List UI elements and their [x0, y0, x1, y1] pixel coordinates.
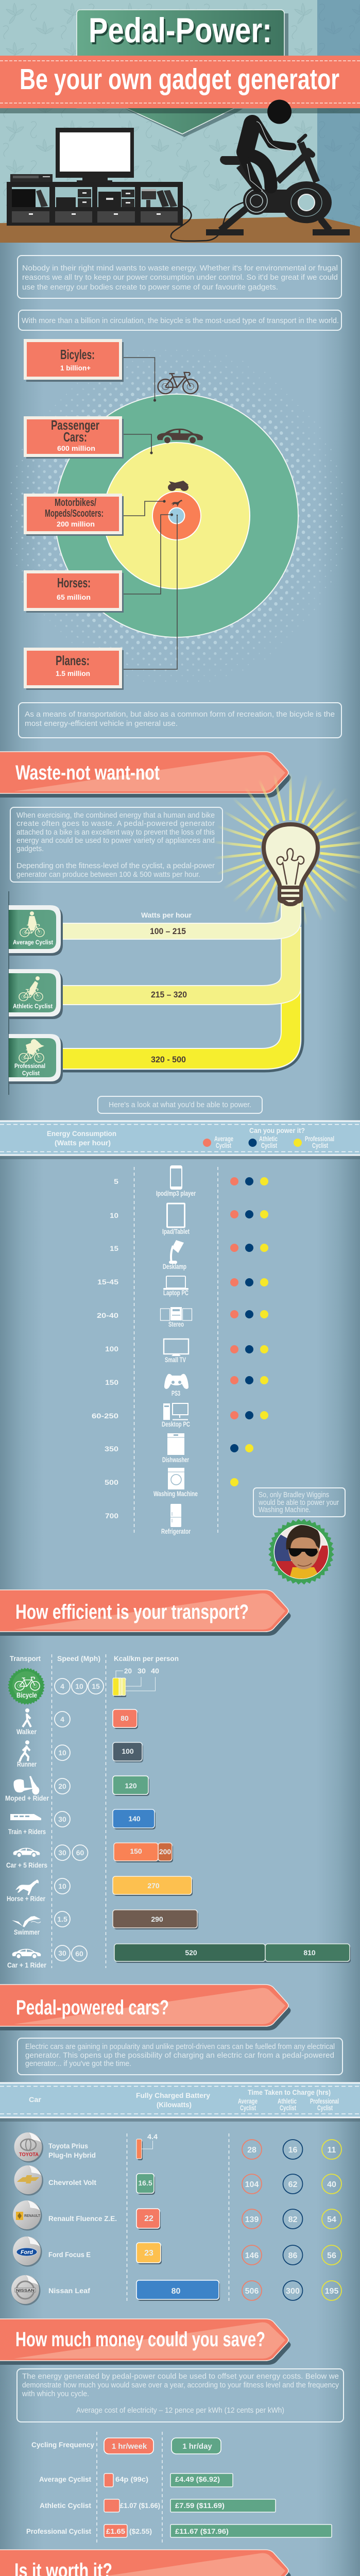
electric cars text box [18, 2038, 342, 2075]
row: washing machine: 500 [105, 1478, 118, 1486]
label: horses: 65 million [57, 593, 91, 601]
electric cars text box: Electric cars are gaining in popularity and unlike petrol-driven cars can be fuelled from any electrical [25, 2042, 335, 2051]
row: toyota: 28 [247, 2146, 256, 2155]
ring: bicycles [55, 394, 298, 637]
row: runner: Runner [17, 1760, 37, 1768]
electric cars text box: generator... if you've got the time. [25, 2059, 131, 2068]
row: bicycle: 10 [75, 1682, 83, 1690]
pipe: average [62, 899, 301, 939]
column header: time: Average [238, 2097, 258, 2105]
row: ford: 86 [288, 2251, 298, 2260]
row: stereo: Stereo [168, 1320, 184, 1328]
icon: horse [171, 500, 182, 506]
row: car + 1 [7, 1944, 351, 1969]
column header: car: Car [29, 2095, 42, 2104]
callout: bradley wiggins: would be able to power your [258, 1498, 339, 1507]
row: ipod: 5 [114, 1177, 118, 1185]
row: bicycle: 20 [124, 1667, 132, 1675]
row: laptop: 15-45 [97, 1278, 118, 1286]
tag: athletic cyclist: Athletic Cyclist [13, 1003, 53, 1010]
waste text box [10, 807, 222, 882]
row: athletic [40, 2499, 276, 2512]
row: nissan: NISSAN [16, 2289, 35, 2293]
intro text box: use the energy our bodies create to power some of our favourite gadgets. [22, 283, 278, 292]
bicycle fact box: With more than a billion in circulation, the bicycle is the most-used type of transport in the world. [22, 316, 339, 325]
row: horse: 10 [58, 1882, 66, 1890]
row: ps3: PS3 [172, 1389, 180, 1397]
bicycle fact box [19, 310, 341, 330]
frequency header: 1 hr/day [182, 2442, 212, 2451]
row: chevrolet: 62 [288, 2180, 298, 2189]
energy table [92, 1166, 268, 1535]
row: toyota: Toyota Prius [48, 2142, 88, 2150]
column header: energy consumption: (Watts per hour) [55, 1139, 111, 1147]
column header: energy consumption: Energy Consumption [47, 1129, 116, 1138]
tag: professional cyclist: Professional [14, 1062, 45, 1070]
transport efficiency chart [5, 1654, 351, 1969]
label: planes [25, 649, 124, 690]
row: bicycle: Bicycle [16, 1691, 37, 1699]
row: train: 140 [128, 1815, 141, 1823]
heading banner: waste-not [0, 752, 290, 798]
heading banner: money: How much money could you save? [15, 2328, 265, 2351]
row: nissan: 80 [172, 2287, 180, 2296]
intro to power table: Here's a look at what you'd be able to power. [109, 1100, 251, 1109]
row: ipad [110, 1204, 268, 1235]
label: bicycles [25, 341, 124, 382]
intro to power table [98, 1096, 262, 1113]
legend: Cyclist [312, 1141, 328, 1149]
row: car + 5: 150 [130, 1847, 142, 1855]
column header: battery [136, 2091, 210, 2109]
heading banner: pedal-powered cars [0, 1985, 290, 2030]
row: average: £4.49 ($6.92) [175, 2475, 220, 2483]
row: bicycle: 4 [60, 1682, 64, 1690]
row: car + 1: Car + 1 Rider [7, 1961, 46, 1969]
row: chevrolet: 104 [245, 2180, 259, 2189]
label: motorbikes: Mopeds/Scooters: [45, 508, 104, 519]
row: athletic: £7.59 ($11.69) [175, 2501, 225, 2510]
header scene [0, 0, 360, 243]
value: professional: 320 - 500 [151, 1055, 186, 1064]
legend: Cyclist [216, 1141, 231, 1149]
row: car + 1: 60 [75, 1950, 83, 1958]
electric cars text box: generator. This opens up the possibility of charging an electric car from a pedal-powered [25, 2051, 334, 2060]
main title: Pedal-Power: [90, 13, 273, 52]
waste text box: generator can produce between 100 & 500 watts per hour. [16, 870, 200, 879]
row: desktop pc: Desktop PC [162, 1420, 190, 1428]
heading banner: pedal-powered cars: Pedal-powered cars? [16, 1996, 169, 2019]
callout: bradley wiggins: Washing Machine. [259, 1505, 311, 1514]
efficiency text box: As a means of transportation, but also as a common form of recreation, the bicycle is the [25, 710, 335, 719]
row: train [8, 1809, 156, 1836]
wooden floor [0, 216, 360, 243]
row: ford: 23 [144, 2249, 153, 2258]
heading banner: worth it [0, 2550, 290, 2576]
halftone dots [13, 352, 340, 679]
row: chevrolet: 40 [327, 2180, 336, 2189]
row: ipad: 10 [110, 1211, 118, 1219]
watts per hour label: Watts per hour [141, 911, 192, 919]
row: washing machine: Washing Machine [153, 1489, 198, 1498]
row: nissan [11, 2275, 341, 2305]
row: chevrolet: Chevrolet Volt [48, 2178, 96, 2187]
row: moped [5, 1776, 149, 1802]
column header: time: Cyclist [240, 2104, 256, 2112]
label: bicycles: Bicyles: [60, 347, 95, 362]
column header: time: Time Taken to Charge (hrs) [248, 2088, 331, 2096]
waste text box: energy and could be used to power variety of appliances and [16, 836, 215, 845]
row: bicycle: 30 [138, 1667, 146, 1675]
cyclist tags [9, 891, 63, 1095]
legend: Average [214, 1134, 233, 1143]
label: planes: Planes: [56, 653, 90, 668]
row: laptop: Laptop PC [163, 1289, 188, 1297]
row: horse: 270 [147, 1882, 160, 1890]
heading banner: how efficient: How efficient is your transport? [15, 1601, 249, 1623]
icon: light bulb [264, 824, 318, 906]
frequency header: 1 hr/week [112, 2442, 147, 2451]
frequency header: Cycling Frequency [31, 2441, 94, 2449]
value: average: 100 – 215 [150, 926, 186, 936]
label: motorbikes: Motorbikes/ [55, 497, 96, 509]
tag: average cyclist: Average Cyclist [13, 939, 53, 946]
waste text box: create often goes to waste. A pedal-powered generator [16, 819, 215, 828]
tag: professional cyclist: Cyclist [22, 1070, 40, 1077]
TV [56, 128, 134, 183]
row: toyota: TOYOTA [19, 2152, 39, 2158]
column header: time: Professional [310, 2097, 339, 2105]
row: train: Train + Riders [8, 1827, 46, 1836]
power cable [171, 202, 244, 241]
column header: battery: Fully Charged Battery [136, 2091, 210, 2099]
efficiency text box: most energy-efficient vehicle in general use. [25, 719, 178, 728]
row: ps3: 150 [105, 1378, 118, 1386]
row: stereo [97, 1307, 268, 1328]
value: athletic: 215 – 320 [151, 990, 187, 999]
row: professional: ($2.55) [129, 2527, 152, 2535]
row: average: 64p (99c) [115, 2475, 148, 2483]
row: nissan: 300 [286, 2287, 300, 2296]
callout: bradley wiggins: So, only Bradley Wiggins [259, 1490, 329, 1499]
intro text box: Nobody in their right mind wants to waste energy. Whether it's for environmental or frugal [22, 264, 338, 273]
ribbon [0, 56, 360, 113]
row: ford: Ford [21, 2249, 33, 2256]
row: bicycle [8, 1667, 159, 1705]
row: moped: 120 [125, 1782, 137, 1790]
row: dishwasher: Dishwasher [162, 1455, 189, 1464]
row: average [39, 2473, 233, 2487]
row: ps3 [105, 1374, 268, 1397]
column header: time: Athletic [278, 2097, 297, 2105]
row: walker: 4 [60, 1715, 64, 1723]
transport numbers concentric chart [13, 341, 340, 690]
row: washing machine [105, 1468, 238, 1498]
row: renault [13, 2200, 341, 2231]
row: car + 1: 520 [185, 1948, 197, 1957]
wattage pipes [62, 899, 303, 1071]
row: small tv: Small TV [165, 1355, 186, 1364]
callout: bradley wiggins [253, 1488, 345, 1517]
column headers: Kcal/km per person [114, 1654, 179, 1663]
row: car + 5 [6, 1843, 173, 1869]
green title badge [77, 10, 288, 137]
row: refrigerator: Refrigerator [161, 1527, 191, 1535]
icon: light bulb rays [209, 768, 360, 931]
row: professional: £1.65 [106, 2527, 125, 2535]
legend: Professional [305, 1134, 334, 1143]
label: planes: 1.5 million [56, 669, 90, 677]
row: moped: Moped + Rider [5, 1794, 49, 1802]
row: renault: Renault Fluence Z.E. [48, 2214, 117, 2223]
row: dishwasher: 350 [105, 1445, 118, 1453]
column headers: Speed (Mph) [57, 1654, 100, 1663]
connector lines [121, 358, 177, 669]
money text box: The energy generated by pedal-power could be used to offset your energy costs. Below we [22, 2372, 339, 2381]
column headers [10, 1654, 179, 1663]
label: motorbikes: 200 million [57, 520, 95, 528]
row: average: Average Cyclist [39, 2475, 91, 2483]
tag: professional cyclist [9, 1034, 63, 1084]
row: horse: Horse + Rider [7, 1894, 45, 1903]
row: car + 5: 60 [76, 1849, 84, 1857]
row: walker [16, 1708, 138, 1736]
row: nissan: Nissan Leaf [48, 2286, 90, 2295]
main title: Pedal-Power: [89, 11, 272, 50]
column header: time [238, 2088, 339, 2112]
row: runner: 10 [58, 1749, 66, 1757]
row: renault: 139 [245, 2215, 259, 2224]
row: swimmer: Swimmer [14, 1928, 40, 1936]
row: athletic: £1.07 ($1.66) [120, 2501, 160, 2510]
savings chart [26, 2432, 332, 2544]
row: walker: Walker [16, 1727, 37, 1736]
row: refrigerator: 700 [105, 1512, 118, 1520]
label: passenger cars: Cars: [63, 429, 87, 445]
row: athletic: Athletic Cyclist [40, 2501, 91, 2510]
cabinet [7, 182, 183, 226]
row: small tv [105, 1339, 268, 1364]
money text box [17, 2369, 344, 2422]
icon: motorbike [168, 481, 188, 491]
row: toyota: 16 [288, 2146, 298, 2155]
row: nissan: 195 [325, 2287, 338, 2296]
exercise bike and rider [206, 100, 350, 235]
waste text box: When exercising, the combined energy that a human and bike [16, 811, 215, 820]
heading banner: waste-not: Waste-not want-not [15, 761, 160, 784]
row: swimmer [12, 1910, 198, 1936]
row: car + 5: 30 [58, 1849, 66, 1857]
row: chevrolet [14, 2165, 341, 2196]
row: renault: 54 [327, 2215, 336, 2224]
row: ipad: Ipad/Tablet [162, 1227, 190, 1235]
row: runner: 100 [122, 1747, 134, 1755]
waste text box: gadgets. [16, 844, 44, 853]
row: car + 1: 30 [58, 1949, 66, 1957]
label: horses [25, 572, 124, 613]
row: desk lamp: Desklamp [163, 1262, 186, 1270]
intro text box: reasons we all try to keep our power consumption under control. So it'd be great if we could [22, 273, 338, 282]
row: moped: 20 [58, 1782, 66, 1790]
row: train: 30 [58, 1815, 66, 1823]
pipe shadow [62, 907, 303, 1071]
tag: athletic cyclist [9, 969, 63, 1019]
frequency header [31, 2438, 221, 2454]
row: desk lamp: 15 [110, 1244, 118, 1252]
icon: bicycle [158, 372, 198, 394]
legend [203, 1134, 334, 1149]
label: passenger cars: Passenger [51, 417, 99, 433]
tag: average cyclist [9, 905, 63, 956]
legend: Cyclist [261, 1141, 277, 1149]
band: energy table header [0, 1121, 360, 1159]
label: bicycles: 1 billion+ [60, 364, 91, 372]
row: horse [7, 1876, 193, 1903]
electric cars table [11, 2132, 341, 2305]
row: desk lamp [110, 1240, 268, 1270]
DVD player [10, 174, 53, 182]
row: walker: 80 [121, 1714, 129, 1722]
row: toyota: 11 [328, 2146, 336, 2155]
row: renault: 22 [144, 2214, 153, 2223]
column header: time: Cyclist [317, 2104, 333, 2112]
row: swimmer: 290 [151, 1915, 163, 1923]
label: horses: Horses: [57, 575, 91, 590]
column header: energy consumption [47, 1129, 116, 1147]
row: bicycle: 15 [92, 1682, 100, 1690]
row: chevrolet: 16.5 [138, 2179, 152, 2187]
row: nissan: 506 [245, 2287, 259, 2296]
icon: car [157, 429, 203, 443]
row: professional [26, 2524, 332, 2537]
row: renault: RENAULT [24, 2214, 41, 2218]
row: ford: Ford Focus E [48, 2250, 91, 2259]
efficiency text box [19, 703, 341, 738]
tag spine [8, 891, 9, 1095]
row: dishwasher [105, 1433, 253, 1464]
row: car + 1: 810 [303, 1948, 316, 1957]
waste text box: attached to a bike is an excellent way to prevent the loss of this [16, 828, 215, 837]
ring: motorbikes [152, 492, 201, 540]
wallpapered wall [0, 0, 360, 227]
heading banner: money [0, 2319, 290, 2365]
row: toyota: 4.4 [147, 2132, 158, 2141]
column header: battery: (Kilowatts) [157, 2100, 192, 2109]
money text box: Average cost of electricity – 12 pence per kWh (12 cents per kWh) [76, 2406, 284, 2415]
column header: can you power it: Can you power it? [249, 1126, 305, 1134]
row: ipod: Ipod/mp3 player [156, 1189, 196, 1197]
legend: Athletic [259, 1134, 278, 1143]
ring: cars [104, 443, 250, 589]
waste text box: Depending on the fitness-level of the cyclist, a pedal-power [16, 861, 215, 870]
row: ipod [114, 1166, 268, 1197]
row: desktop pc [92, 1403, 268, 1428]
portrait: bradley wiggins [268, 1519, 334, 1585]
row: swimmer: 1.5 [57, 1915, 67, 1923]
label: motorbikes [25, 495, 124, 536]
row: laptop [97, 1276, 268, 1297]
row: ford: 146 [245, 2251, 259, 2260]
row: toyota [14, 2132, 341, 2163]
label: passenger cars [25, 417, 124, 459]
row: stereo: 20-40 [97, 1311, 118, 1319]
row: renault: 82 [288, 2215, 298, 2224]
row: car + 5: Car + 5 Riders [6, 1861, 47, 1869]
label: passenger cars: 600 million [57, 444, 95, 452]
row: desktop pc: 60-250 [92, 1412, 118, 1420]
band: cars table header [0, 2082, 360, 2122]
row: runner [17, 1740, 143, 1768]
row: car + 5: 200 [159, 1848, 171, 1856]
pipe: athletic [62, 927, 301, 1005]
money text box: with which you cycle. [22, 2389, 89, 2398]
row: professional: Professional Cyclist [26, 2527, 91, 2535]
row: ford [13, 2236, 341, 2267]
pipe: professional [62, 979, 301, 1069]
ring: horses [169, 508, 184, 523]
money text box: demonstrate how much you would save over a year, according to your fitness level and the frequency [22, 2381, 339, 2389]
row: professional: £11.67 ($17.96) [175, 2527, 229, 2535]
intro text box [18, 256, 341, 298]
row: toyota: Plug-In Hybrid [48, 2151, 96, 2159]
row: refrigerator [105, 1504, 191, 1535]
heading banner: how efficient [0, 1590, 290, 1636]
column headers: Transport [10, 1654, 41, 1663]
column header: time: Cyclist [280, 2104, 296, 2112]
connector dots [150, 399, 178, 516]
row: ford: 56 [327, 2251, 336, 2260]
row: small tv: 100 [105, 1345, 118, 1353]
row: bicycle: 40 [151, 1667, 159, 1675]
